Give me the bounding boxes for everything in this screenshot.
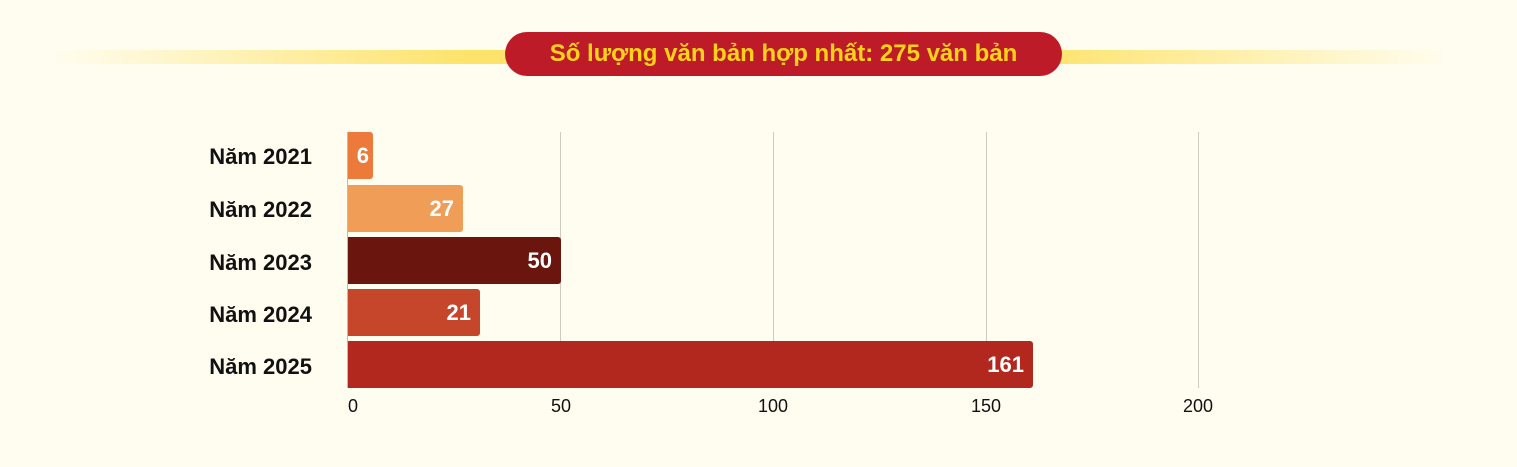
label 2023: Năm 2023 <box>209 250 312 275</box>
x axis ticks: 50 <box>551 396 571 416</box>
bar 2023 <box>348 237 561 284</box>
bar 2023: 50 <box>528 248 552 273</box>
label 2025: Năm 2025 <box>209 354 312 379</box>
bar 2021 <box>348 132 373 179</box>
x axis ticks: 0 <box>348 396 358 416</box>
bar 2025: 161 <box>987 352 1024 377</box>
title band <box>50 50 1450 64</box>
bar 2025 <box>348 341 1033 388</box>
x axis ticks <box>348 396 1213 416</box>
label 2021: Năm 2021 <box>209 144 312 169</box>
label 2024: Năm 2024 <box>209 302 312 327</box>
title pill: Số lượng văn bản hợp nhất: 275 văn bản <box>550 40 1017 67</box>
x axis ticks: 150 <box>971 396 1001 416</box>
x axis ticks: 200 <box>1183 396 1213 416</box>
title pill <box>505 32 1062 76</box>
x axis ticks: 100 <box>758 396 788 416</box>
bar 2022 <box>348 185 463 232</box>
bar 2022: 27 <box>430 196 454 221</box>
label 2022: Năm 2022 <box>209 197 312 222</box>
bar 2024 <box>348 289 480 336</box>
bar 2024: 21 <box>447 300 471 325</box>
axis line <box>347 132 348 388</box>
bar 2021: 6 <box>357 143 369 168</box>
